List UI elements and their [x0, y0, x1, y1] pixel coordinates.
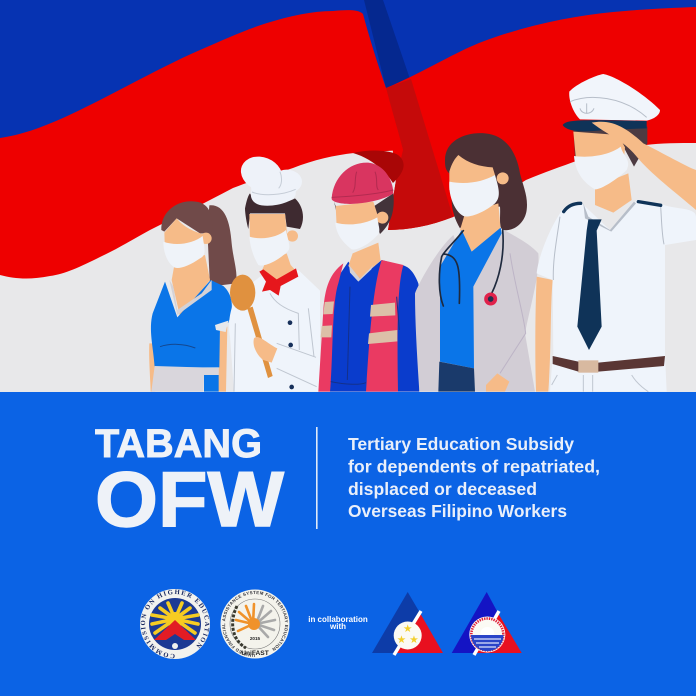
subtitle text block: Tertiary Education Subsidy: [348, 434, 574, 454]
figure: construction worker: [318, 163, 421, 392]
tie: [577, 219, 602, 350]
logo: CHED seal: COMMISSION ON HIGHER EDUCATION: [140, 590, 210, 658]
logo: UniFAST seal: UNIFIED FINANCIAL ASSISTANCE SYSTEM FOR TERTIARY EDUCATION: [222, 590, 288, 657]
logo: triangle with sun and waves: [452, 592, 522, 655]
panel: blue title band: [0, 392, 696, 696]
collaboration note: in collaboration: [308, 615, 368, 624]
flag background: [0, 0, 696, 392]
subtitle text block: [348, 434, 600, 521]
subtitle text block: displaced or deceased: [348, 479, 537, 499]
figure: sailor: [535, 74, 696, 392]
left three workers: [149, 151, 421, 392]
title: Tabang OFW: [95, 422, 284, 543]
subtitle text block: Overseas Filipino Workers: [348, 501, 567, 521]
right red flag: [386, 7, 696, 230]
saluting arm: [592, 122, 696, 210]
collaboration note: [308, 615, 368, 631]
collaboration note: with: [329, 622, 346, 631]
title: Tabang OFW: OFW: [95, 455, 284, 543]
figure: waitress: [149, 201, 236, 392]
logo: DOLE-style triangle with stars: ★: [409, 634, 419, 646]
figure: doctor: [415, 133, 539, 392]
logo: DOLE-style triangle with stars: ★: [403, 623, 413, 635]
dark blue fold: [364, 0, 410, 88]
subtitle text block: for dependents of repatriated,: [348, 456, 600, 476]
logo: DOLE-style triangle with stars: [372, 592, 443, 655]
logo: UniFAST seal: UniFAST: [241, 650, 269, 657]
chef hat: [236, 151, 302, 206]
figure: chef: [229, 151, 320, 392]
logo: UniFAST seal: 2015: [250, 636, 261, 641]
right two workers: [415, 74, 696, 392]
cap: [569, 74, 660, 121]
stethoscope: [439, 230, 503, 306]
dark red flag curl: [353, 151, 404, 183]
dark red fold: [386, 79, 453, 230]
logo: DOLE-style triangle with stars: ★: [397, 634, 407, 646]
left red flag: [0, 10, 403, 279]
belt: [553, 356, 665, 372]
title: Tabang OFW: TABANG: [95, 422, 262, 466]
